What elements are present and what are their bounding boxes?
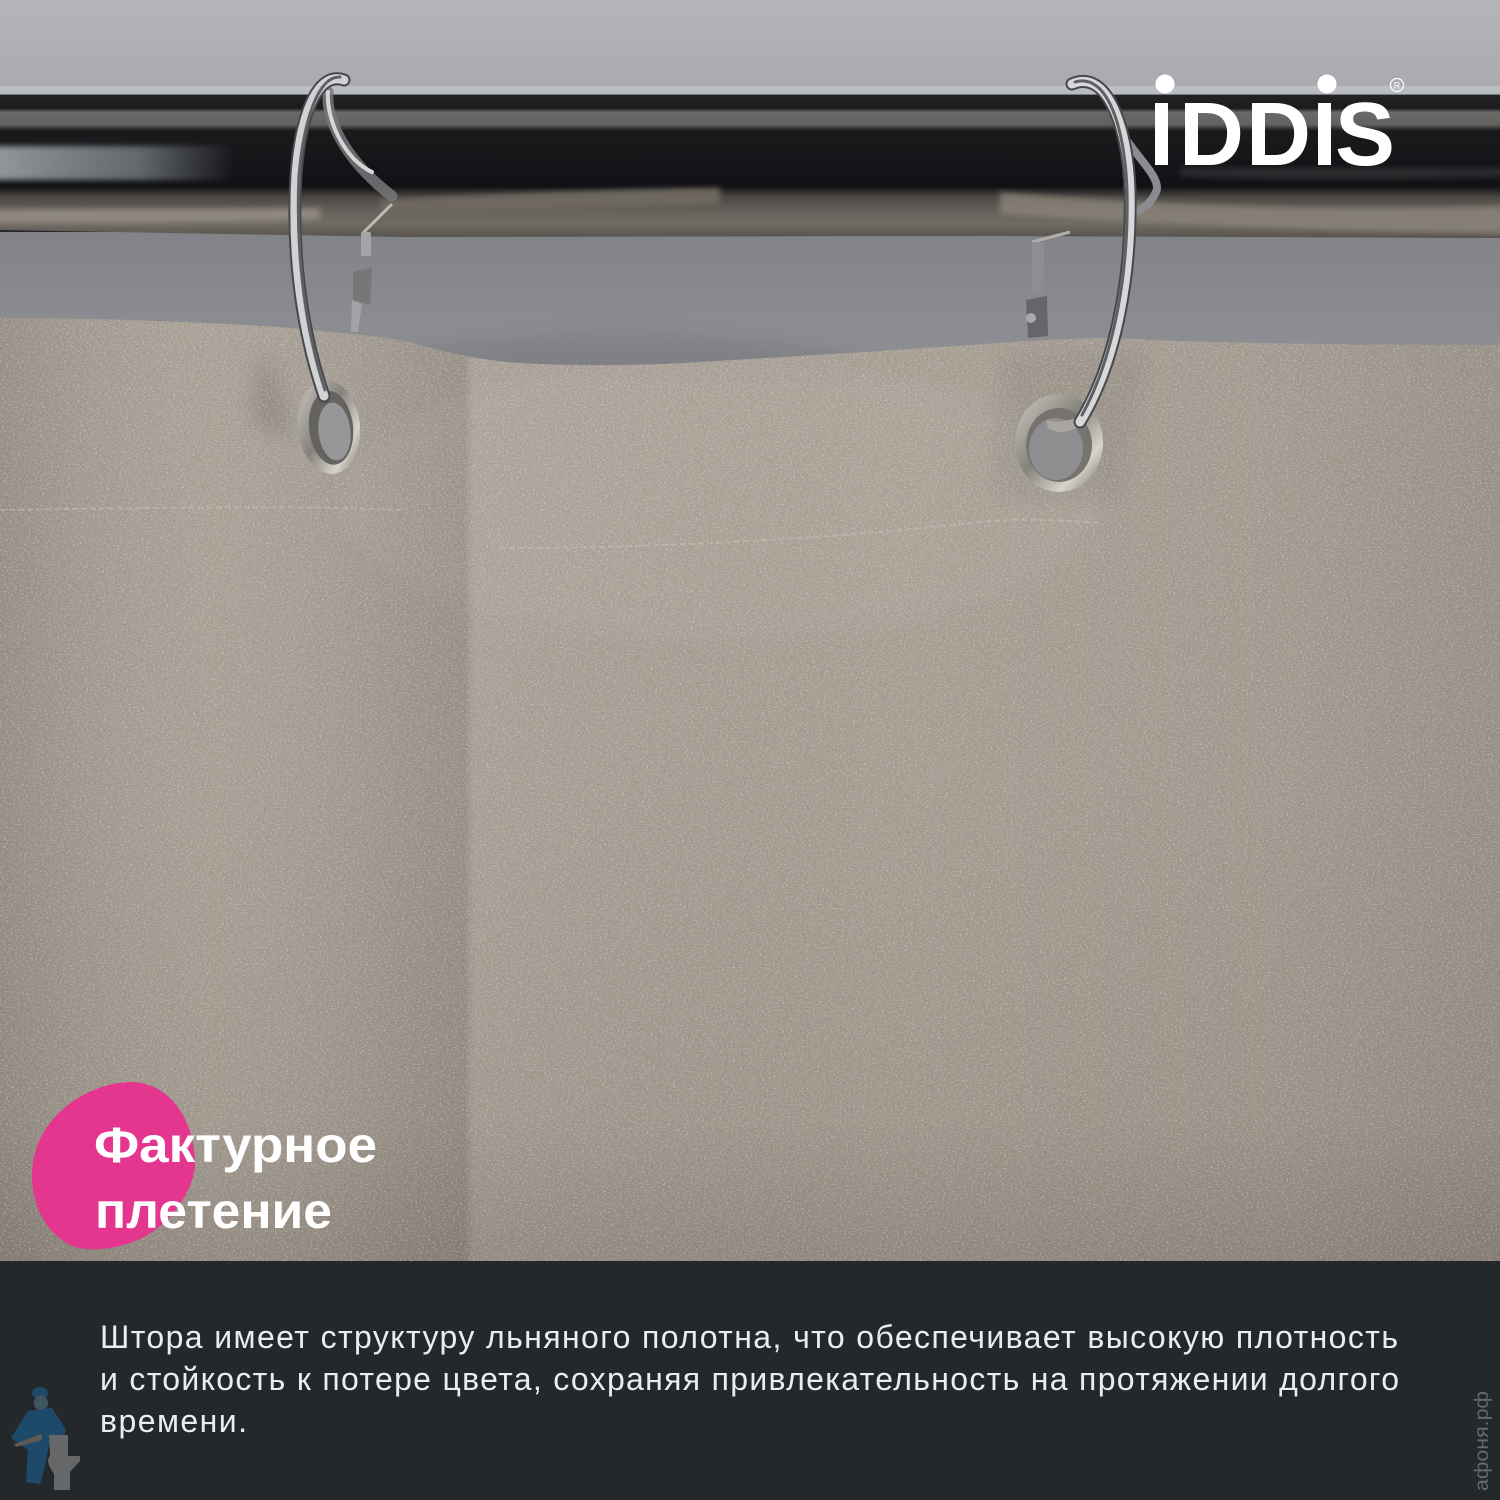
heading: Фактурное	[94, 1117, 377, 1173]
heading: плетение	[95, 1183, 332, 1239]
dark footer panel	[0, 1261, 1500, 1500]
background wall below rod	[0, 232, 1500, 408]
watermark: plumber with toilet	[11, 1387, 80, 1490]
watermark: site name: афоня.рф	[1472, 1391, 1493, 1491]
right ring hook	[1026, 232, 1070, 338]
right curtain ring	[1072, 81, 1157, 422]
description text: и стойкость к потере цвета, сохраняя привлекательность на протяжении долгого	[100, 1361, 1399, 1397]
description text	[100, 1319, 1399, 1439]
shower curtain fabric	[0, 310, 1500, 1261]
heading	[94, 1117, 377, 1239]
description text: времени.	[100, 1403, 247, 1439]
right grommet	[1015, 394, 1103, 492]
brand logo IDDIS: IDDIS	[1149, 85, 1395, 185]
chrome curtain rod	[0, 86, 1500, 238]
brand logo IDDIS: R	[1394, 80, 1401, 90]
background wall above rod	[0, 0, 1500, 92]
pink blob accent	[32, 1082, 195, 1249]
left grommet	[293, 377, 365, 477]
left ring hook	[351, 204, 392, 332]
description text: Штора имеет структуру льняного полотна, что обеспечивает высокую плотность	[100, 1319, 1398, 1355]
left curtain ring	[295, 77, 392, 396]
